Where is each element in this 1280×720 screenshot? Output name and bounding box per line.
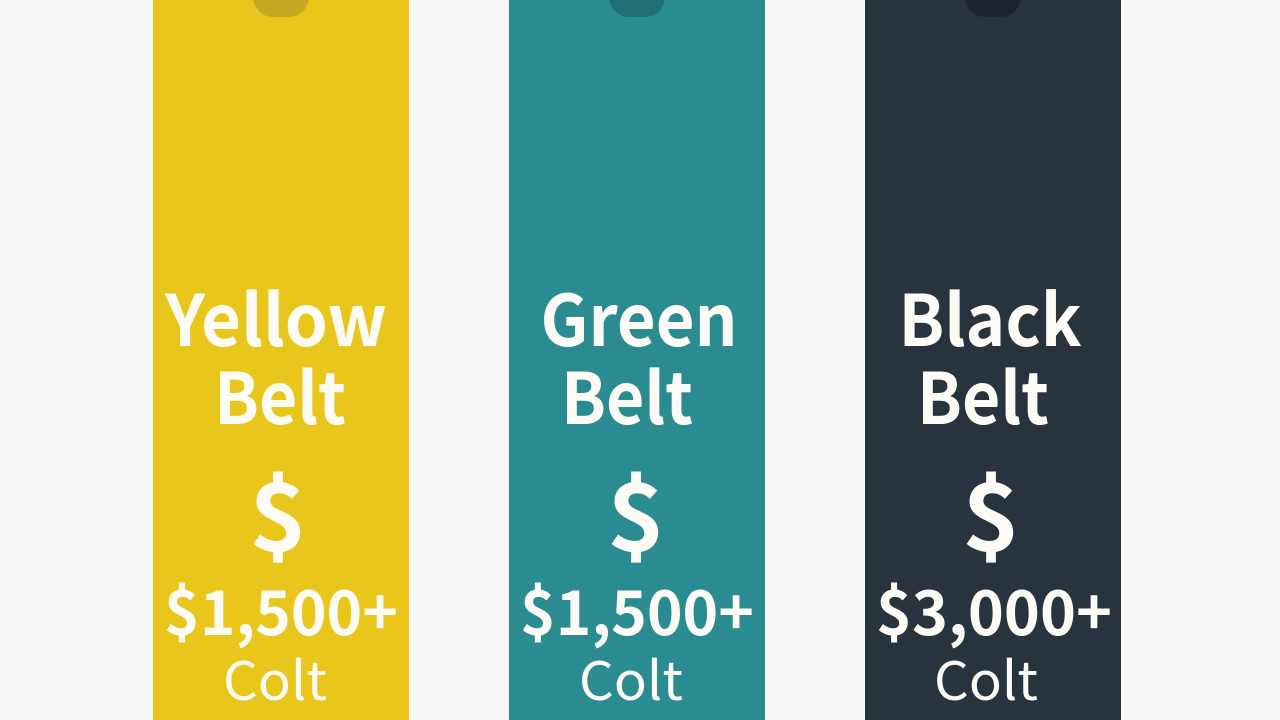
icon: black belt notch (965, 0, 1021, 17)
icon: yellow dollar sign: $ (249, 443, 307, 579)
price: black belt: $3,000+ (876, 563, 1112, 653)
price: green belt: $1,500+ (520, 563, 754, 653)
panel: black belt (865, 0, 1121, 720)
price: yellow belt: $1,500+ (164, 563, 398, 653)
icon: green belt notch (609, 0, 665, 17)
icon: yellow belt notch (253, 0, 309, 17)
heading: yellow belt (164, 265, 387, 445)
heading: black belt: Black (898, 265, 1082, 367)
icon: black dollar sign: $ (962, 443, 1020, 579)
label: black belt tier: Colt (934, 640, 1038, 716)
heading: green belt: Green (540, 265, 738, 367)
heading: green belt: Belt (561, 343, 693, 445)
label: green belt tier: Colt (579, 640, 683, 716)
heading: yellow belt: Belt (214, 343, 346, 445)
heading: black belt (898, 265, 1082, 445)
heading: green belt (540, 265, 738, 445)
heading: yellow belt: Yellow (164, 265, 387, 367)
label: yellow belt tier: Colt (223, 640, 327, 716)
heading: black belt: Belt (917, 343, 1049, 445)
panel: green belt (509, 0, 765, 720)
icon: green dollar sign: $ (607, 443, 665, 579)
panel: yellow belt (153, 0, 409, 720)
